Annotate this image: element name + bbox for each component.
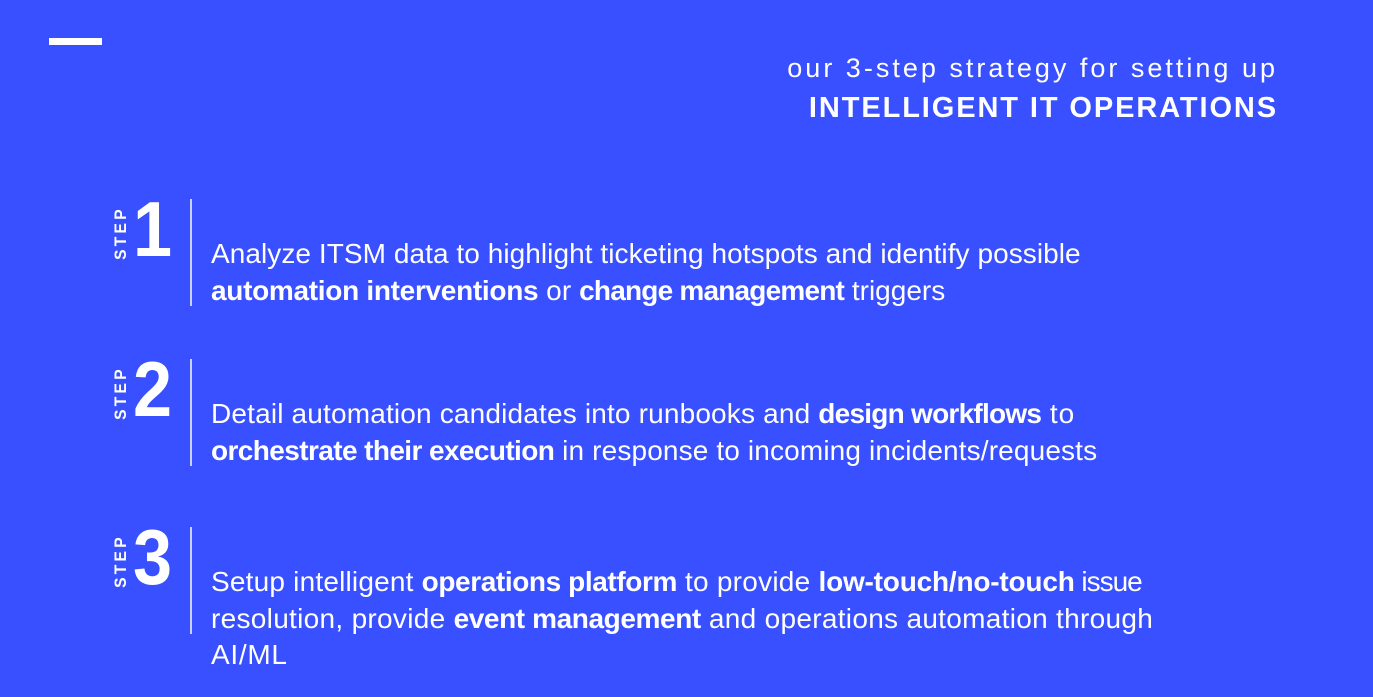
step 3: [110, 513, 1153, 670]
step 3 text: AI/ML: [211, 639, 288, 670]
step 1 text: automation interventions or change management triggers: [211, 275, 945, 306]
step 1 label: STEP: [110, 206, 130, 259]
step 3 text: Setup intelligent operations platform to provide low-touch/no-touch issue: [211, 566, 1142, 597]
step 1 divider: [190, 199, 192, 306]
title: INTELLIGENT IT OPERATIONS: [809, 92, 1278, 124]
step 3 text: [211, 566, 1153, 670]
title: our 3-step strategy for setting up: [787, 53, 1278, 83]
step 2 text: Detail automation candidates into runbooks and design workflows to: [211, 398, 1075, 429]
step 1 text: [211, 238, 1081, 306]
step 3 text: resolution, provide event management and operations automation through: [211, 603, 1153, 634]
step 3 label: STEP: [110, 534, 130, 587]
step 2: [110, 345, 1097, 466]
step 2 text: [211, 398, 1097, 466]
step 1 text: Analyze ITSM data to highlight ticketing hotspots and identify possible: [211, 238, 1081, 269]
step 2 number: 2: [133, 345, 172, 433]
step 3 number: 3: [133, 513, 172, 601]
step 2 divider: [190, 359, 192, 466]
step 1: [110, 185, 1081, 306]
step 1 number: 1: [133, 185, 172, 273]
accent bar: [49, 38, 102, 45]
step 2 text: orchestrate their execution in response to incoming incidents/requests: [211, 435, 1097, 466]
step 2 label: STEP: [110, 366, 130, 419]
title: [787, 53, 1278, 124]
step 3 divider: [190, 527, 192, 634]
